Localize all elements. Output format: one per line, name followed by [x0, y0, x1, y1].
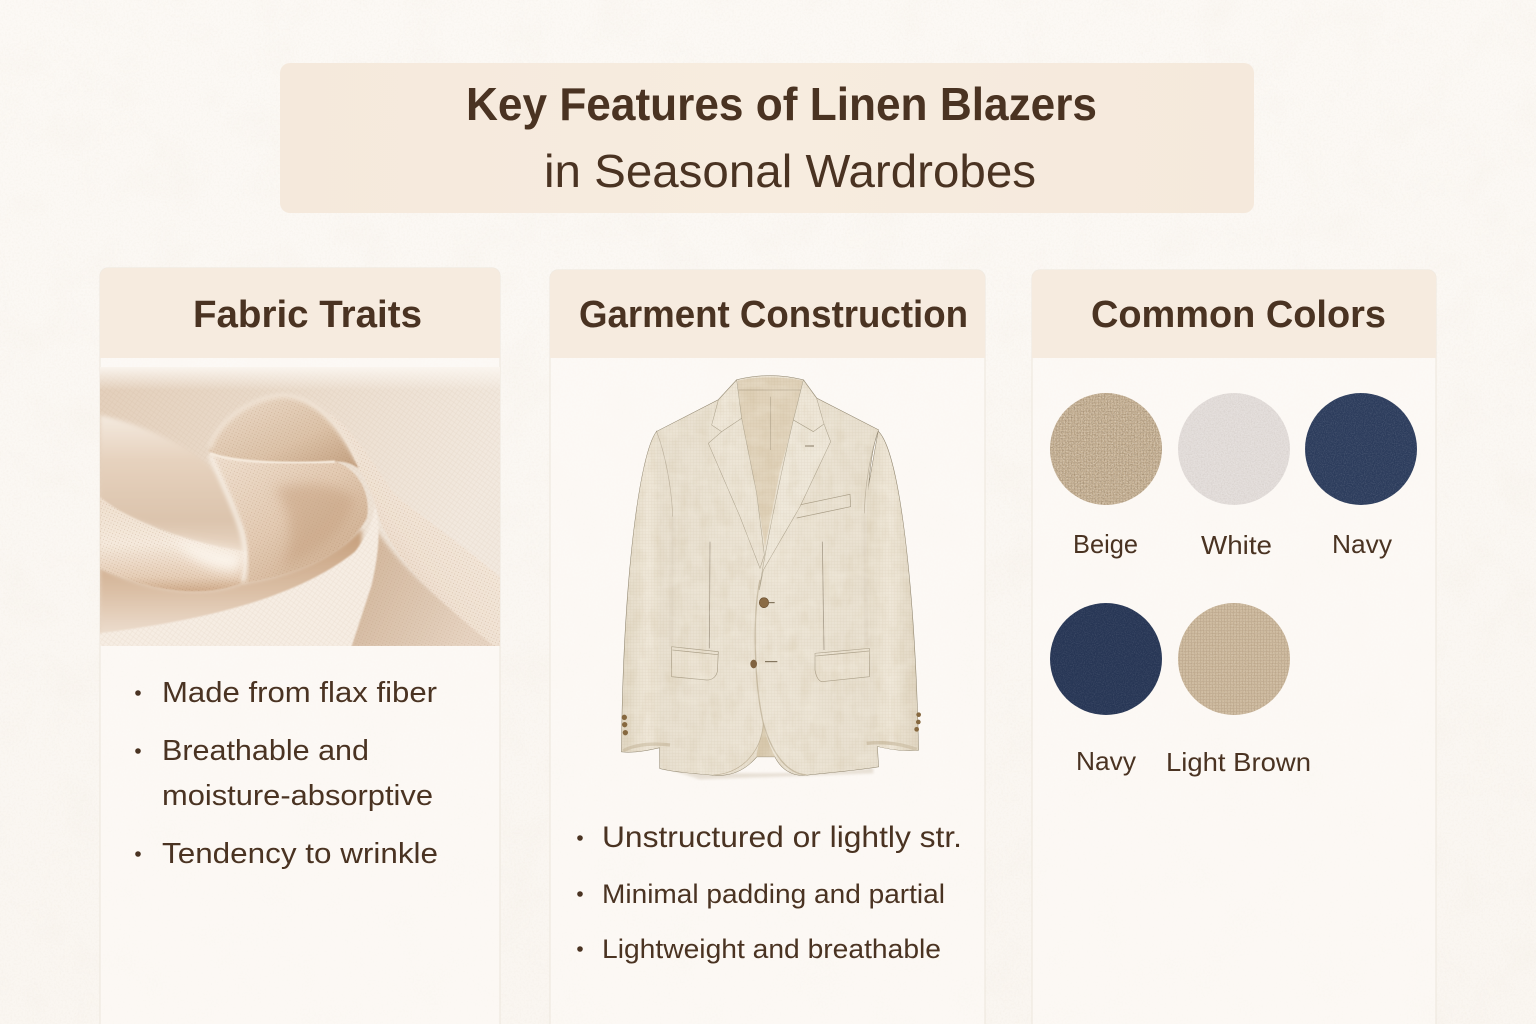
- title line 1: Key Features of Linen Blazers: [466, 78, 1097, 130]
- bullet list: construction: [577, 821, 962, 964]
- jacket outline: [622, 376, 918, 775]
- panel: garment construction: [550, 270, 985, 1024]
- bullet list: construction: Unstructured or lightly str.: [602, 821, 962, 854]
- bullet list: construction: Minimal padding and partial: [602, 879, 945, 909]
- bullet list: fabric traits: Made from flax fiber: [162, 677, 437, 709]
- image: linen blazer: [613, 370, 927, 780]
- left lapel: [708, 418, 764, 568]
- swatch: beige: [1050, 393, 1162, 505]
- left collar: [712, 380, 742, 432]
- swatch: navy: [1305, 393, 1417, 505]
- jacket mottling: [613, 370, 927, 780]
- bullet list: fabric traits: Breathable and: [162, 735, 369, 767]
- heading band: common colors: Common Colors: [1091, 294, 1386, 336]
- panel: common colors: [1032, 270, 1436, 1024]
- heading band: garment construction: [550, 270, 985, 358]
- swatch: navy 2: [1050, 603, 1162, 715]
- swatch: white: [1178, 393, 1290, 505]
- label: navy: Navy: [1332, 529, 1392, 559]
- bullet list: fabric traits: Tendency to wrinkle: [162, 838, 438, 870]
- sleeve seams and cuffs: [623, 432, 917, 751]
- title banner: [280, 63, 1254, 213]
- label: beige: Beige: [1073, 529, 1138, 559]
- bullet list: fabric traits: moisture-absorptive: [162, 780, 433, 812]
- bullet list: fabric traits: [135, 677, 438, 870]
- swatch: light brown: [1178, 603, 1290, 715]
- label: navy 2: Navy: [1076, 746, 1136, 776]
- buttons: [622, 598, 921, 735]
- heading band: garment construction: Garment Construction: [579, 294, 968, 336]
- bullet list: construction: Lightweight and breathable: [602, 934, 941, 964]
- right pocket flap: [815, 648, 869, 682]
- heading band: fabric traits: Fabric Traits: [193, 294, 422, 336]
- heading band: common colors: [1032, 270, 1436, 358]
- right collar: [793, 380, 824, 432]
- inner lining: [737, 377, 803, 547]
- darts: [709, 542, 824, 650]
- front edge: [755, 580, 807, 775]
- label: light brown: Light Brown: [1166, 747, 1311, 777]
- jacket body and sleeves: [622, 376, 918, 775]
- left pocket flap: [672, 647, 718, 680]
- image: folded linen fabric: [98, 365, 502, 648]
- right lapel: [759, 420, 831, 590]
- heading band: fabric traits: [100, 268, 500, 358]
- chest pocket: [797, 494, 851, 518]
- label: white: White: [1201, 530, 1272, 560]
- title line 2: in Seasonal Wardrobes: [544, 145, 1036, 197]
- panel: fabric traits: [98, 268, 502, 1024]
